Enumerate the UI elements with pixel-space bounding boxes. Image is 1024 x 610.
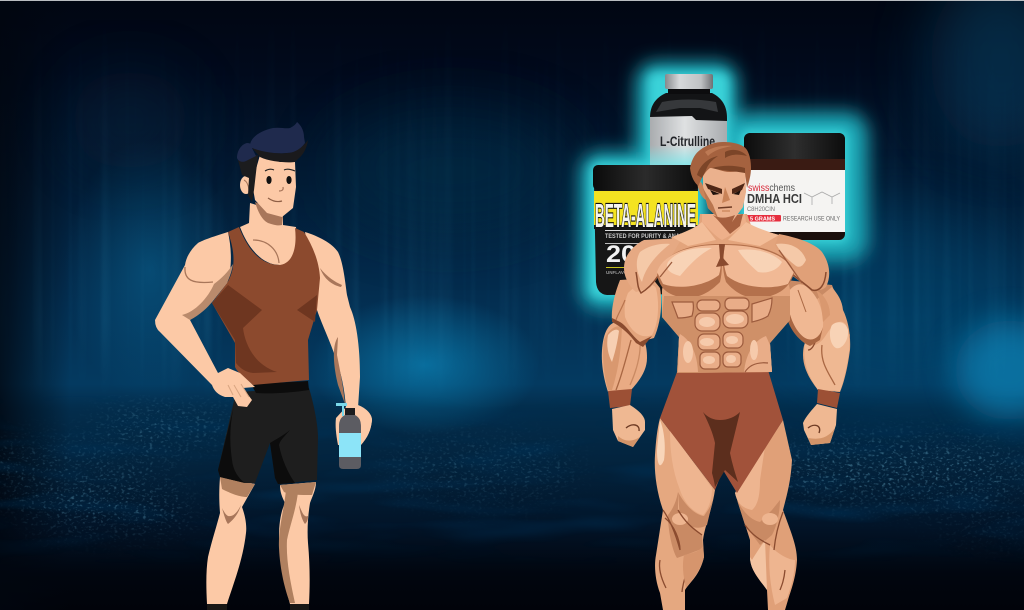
left leg [206,477,255,604]
head [238,155,296,217]
shorts [218,388,318,484]
jar: DMHA HCI: C8H20CIN [747,206,775,213]
left deltoid [624,238,682,293]
face features [705,183,745,211]
abdominals [662,296,790,373]
left forearm [602,322,647,392]
right biceps [787,284,830,346]
bottle: L-Citrulline: L-Citrulline [660,134,715,149]
shoes cut off by frame [207,604,227,610]
hair [237,122,308,162]
tank top [212,227,320,385]
jar: DMHA HCI [744,133,845,240]
traps and neck [672,214,779,246]
fingers in front of bottle [360,412,372,445]
neck and chest [240,202,297,265]
character: lean man with water bottle [155,122,372,610]
tub: BETA-ALANINE: TESTED FOR PURITY & ANALYSIS [605,233,696,240]
waistband [251,381,309,393]
supplement products with cyan glow [580,62,868,310]
left arm and hand on hip [155,232,255,407]
left fist [612,405,645,447]
right fist [803,404,837,445]
water bottle [336,403,361,469]
jar: DMHA HCI: DMHA HCI [747,192,802,206]
supplement products with cyan glow: BETA-ALANINE [595,197,696,234]
jar: DMHA HCI: 5 GRAMS [750,216,775,222]
hair [690,142,751,188]
bottle: L-Citrulline [650,74,727,171]
left upper arm [612,278,661,347]
wristband right [817,389,840,408]
product glow [580,62,868,310]
right arm underlay [786,280,850,392]
wristband left [608,389,632,408]
right forearm [803,287,850,392]
tub: BETA-ALANINE: UNFLAVORED [606,270,638,275]
tub: BETA-ALANINE: 200 [606,241,651,268]
face features [265,169,295,202]
left leg [655,418,715,610]
tub: BETA-ALANINE [593,165,698,295]
right leg [735,420,797,610]
right arm [305,232,360,408]
pectorals [657,244,802,298]
torso [662,214,790,373]
head and face [697,160,746,223]
jar: DMHA HCI: RESEARCH USE ONLY [783,216,840,222]
right deltoid [775,234,829,290]
right leg [279,482,316,604]
shorts [660,370,783,493]
jar: DMHA HCI: swisschems [748,182,795,194]
hand behind bottle [336,405,372,446]
character: oversized muscular man [602,142,850,610]
